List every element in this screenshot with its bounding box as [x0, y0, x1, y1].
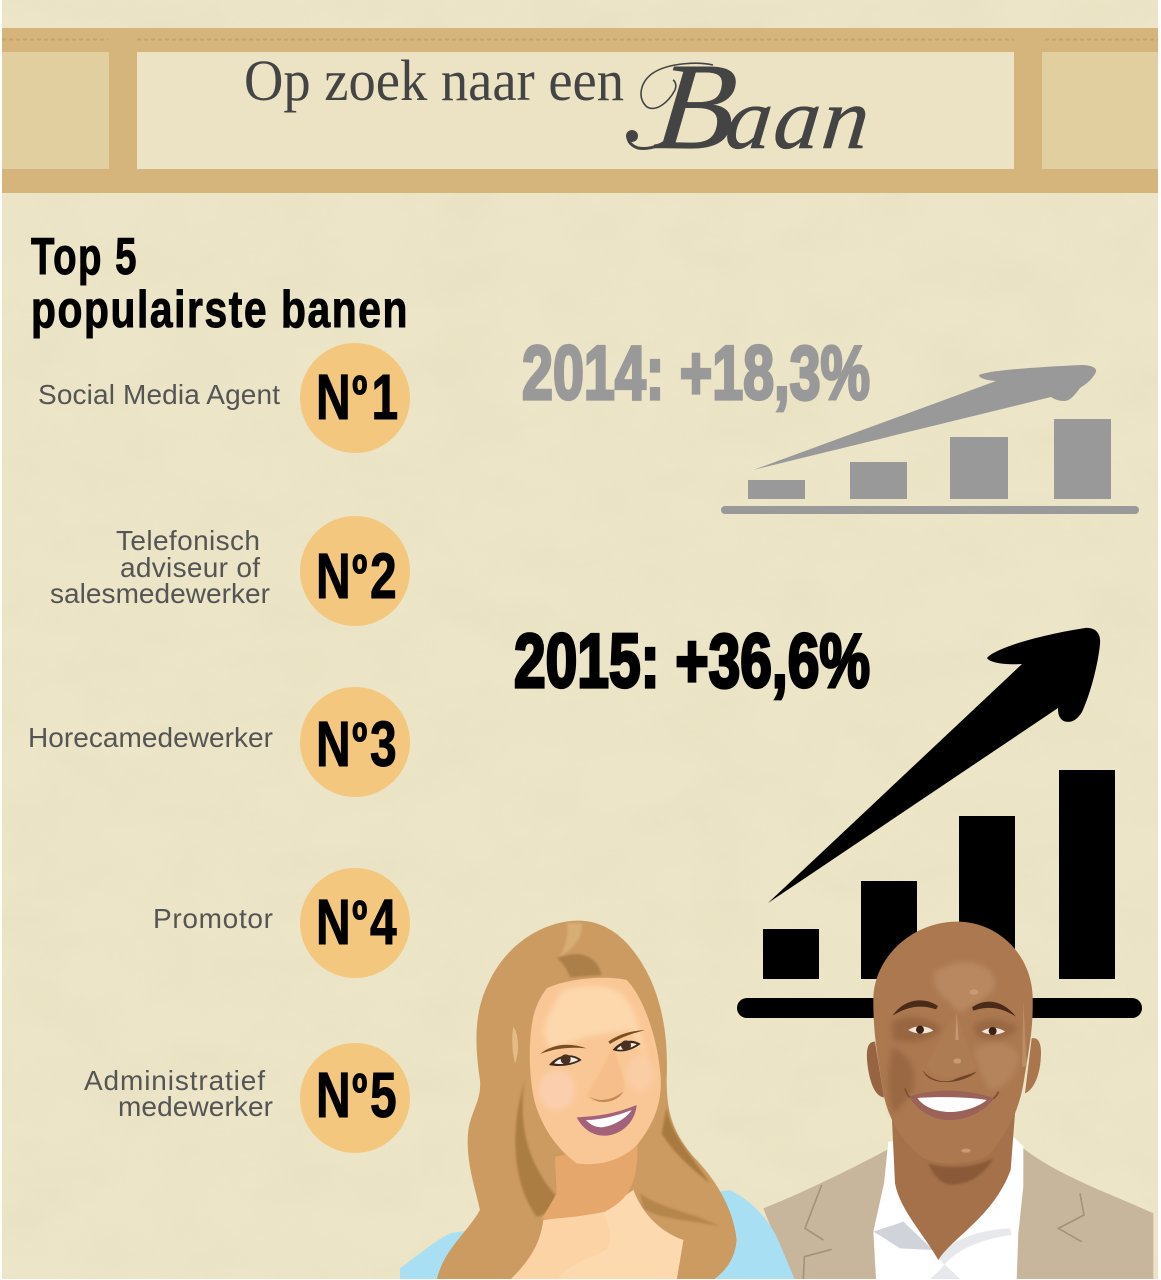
woman face shading	[538, 986, 653, 1110]
rank 2: Telefonisch	[116, 525, 260, 556]
rank 4: 4	[370, 886, 397, 958]
rank 1: N	[316, 361, 351, 433]
arrow 2014	[753, 365, 1096, 470]
man jacket	[763, 1148, 1153, 1279]
woman neck	[542, 1143, 637, 1219]
ranking list	[28, 343, 410, 1153]
illustration: woman	[400, 921, 795, 1280]
man eyebrows	[893, 1000, 938, 1016]
man eyes	[908, 1026, 933, 1033]
rank 5	[84, 1043, 410, 1153]
rank 4: Promotor	[153, 903, 273, 934]
illustration: man	[763, 922, 1153, 1279]
woman face	[530, 978, 661, 1164]
man face shading	[888, 962, 1020, 1113]
title script word: B	[649, 37, 743, 175]
rank 2	[50, 516, 410, 626]
rank 1: º	[352, 364, 367, 426]
woman blouse	[400, 1190, 795, 1280]
woman hair	[437, 921, 737, 1280]
rank 5: Administratief	[84, 1065, 265, 1096]
rank 2: adviseur of	[120, 552, 260, 583]
chart 2015	[737, 628, 1142, 1018]
man shirt	[873, 1133, 1023, 1279]
stat 2015: 2015: +36,6%	[514, 619, 870, 704]
woman eyes	[549, 1055, 582, 1066]
rank 5: º	[352, 1062, 367, 1124]
stat 2014: 2014: +18,3%	[522, 331, 870, 416]
rank 4: º	[352, 889, 367, 951]
heading: top 5	[31, 228, 409, 339]
rank 4	[153, 868, 410, 978]
header banner	[2, 28, 1158, 193]
chart 2014	[721, 365, 1139, 514]
title	[244, 37, 880, 175]
rank 1: Social Media Agent	[38, 379, 280, 410]
rank 1	[38, 343, 410, 453]
rank 3: N	[316, 708, 351, 780]
title script word: aan	[721, 69, 877, 167]
heading: top 5: populairste banen	[31, 281, 409, 339]
man head	[873, 922, 1033, 1163]
rank 4: N	[316, 886, 351, 958]
rank 2: º	[352, 543, 367, 605]
man mouth	[909, 1091, 994, 1120]
woman mouth	[577, 1105, 637, 1136]
arrow 2015	[768, 628, 1100, 903]
rank 3	[28, 687, 410, 797]
rank 3: º	[352, 711, 367, 773]
rank 5: 5	[370, 1059, 397, 1131]
man ears	[867, 1042, 884, 1097]
rank 3: Horecamedewerker	[28, 722, 273, 753]
title: Op zoek naar een	[244, 48, 624, 113]
rank 2: 2	[370, 540, 397, 612]
rank 2: N	[316, 540, 351, 612]
rank 5: N	[316, 1059, 351, 1131]
rank 1: 1	[372, 361, 398, 433]
heading: top 5: Top 5	[31, 228, 138, 286]
woman chest	[510, 1190, 683, 1280]
man neck	[892, 1113, 1015, 1260]
rank 2: salesmedewerker	[50, 578, 270, 609]
rank 3: 3	[370, 708, 397, 780]
page edge	[0, 1279, 1161, 1280]
woman eyebrows	[540, 1045, 587, 1054]
rank 5: medewerker	[118, 1091, 273, 1122]
title script word	[626, 37, 880, 175]
